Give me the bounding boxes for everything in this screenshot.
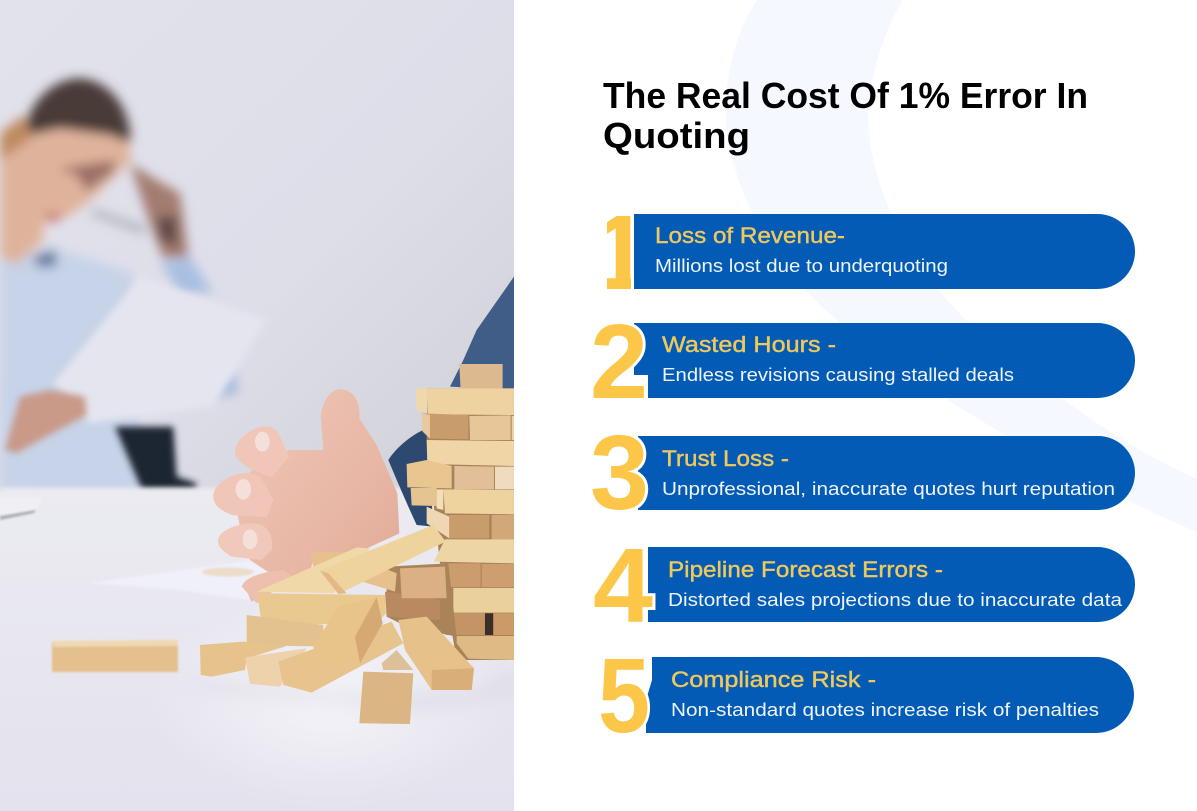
item 3 heading: Trust Loss - bbox=[662, 446, 789, 471]
woman's hand bbox=[5, 390, 87, 453]
fingernails bbox=[255, 432, 270, 452]
background arc bbox=[726, 0, 1197, 532]
item 2 heading: Wasted Hours - bbox=[662, 332, 836, 357]
item 5 heading: Compliance Risk - bbox=[671, 667, 876, 692]
reaching hand bbox=[213, 389, 399, 603]
item 4 heading: Pipeline Forecast Errors - bbox=[668, 557, 943, 582]
item 3 description: Unprofessional, inaccurate quotes hurt reputation bbox=[662, 479, 1115, 499]
table edge bbox=[0, 484, 402, 492]
far-left block bbox=[52, 640, 178, 672]
item 5: Compliance Risk bbox=[598, 637, 1134, 755]
document sheet bbox=[54, 283, 248, 424]
pill 5 bbox=[646, 657, 1134, 733]
number 3: 3 bbox=[590, 414, 649, 532]
block shadows bbox=[412, 696, 443, 708]
block tower bbox=[407, 364, 514, 660]
item 5 description: Non-standard quotes increase risk of penalties bbox=[671, 700, 1099, 720]
item 2: Wasted Hours bbox=[590, 303, 1135, 421]
item 1: Loss of Revenue bbox=[607, 214, 1135, 289]
fallen blocks bbox=[200, 525, 474, 724]
pill 4 bbox=[648, 547, 1135, 622]
pill 3 bbox=[638, 436, 1135, 510]
item 1 description: Millions lost due to underquoting bbox=[655, 256, 948, 276]
pill 2 bbox=[634, 323, 1135, 398]
table top bbox=[0, 492, 514, 811]
blurred woman reading a document bbox=[0, 78, 267, 492]
blurred item at table edge bbox=[0, 497, 42, 518]
title bbox=[603, 75, 1088, 156]
title: The Real Cost Of 1% Error In bbox=[603, 75, 1088, 116]
item 1 heading: Loss of Revenue- bbox=[655, 223, 845, 248]
white shirt cuff bbox=[398, 497, 413, 537]
number 2: 2 bbox=[590, 303, 648, 421]
light reflection on table bbox=[250, 663, 400, 752]
photo: collapsing wooden block tower bbox=[0, 0, 514, 811]
item 4 description: Distorted sales projections due to inaccurate data bbox=[668, 590, 1123, 610]
pill 1 bbox=[634, 214, 1135, 289]
number 4: 4 bbox=[593, 527, 653, 645]
document on table bbox=[106, 562, 266, 598]
dark sleeve bbox=[388, 428, 433, 527]
hand, sleeve and blocks bbox=[200, 277, 514, 724]
item 2 description: Endless revisions causing stalled deals bbox=[662, 365, 1014, 385]
wall background bbox=[0, 0, 514, 500]
chair bbox=[115, 427, 197, 489]
item 4: Pipeline Forecast Errors bbox=[593, 527, 1135, 645]
number 1: 1 bbox=[591, 194, 650, 312]
item 3: Trust Loss bbox=[590, 414, 1135, 532]
number 5: 5 bbox=[598, 637, 650, 755]
title: Quoting bbox=[603, 115, 750, 156]
